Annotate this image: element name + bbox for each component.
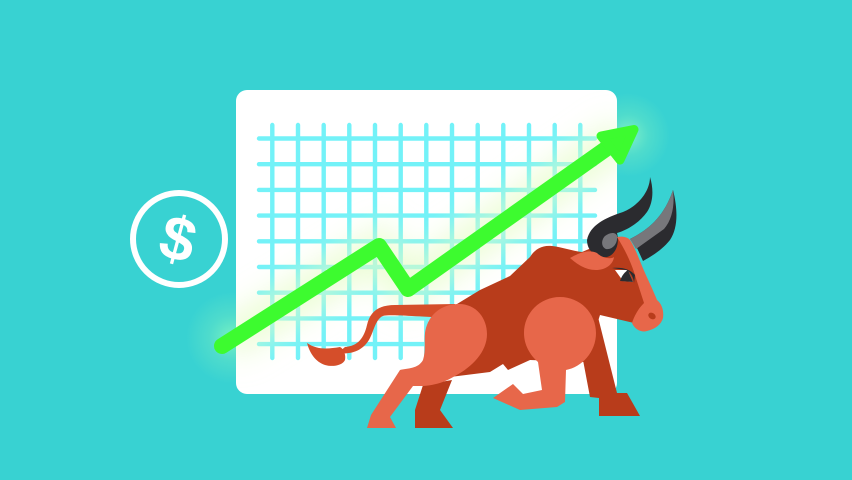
- arrow glow: bottom left: [186, 292, 278, 384]
- bull body and head: [450, 237, 648, 377]
- bull far horn: [630, 190, 676, 261]
- icon: dollar coin: $: [152, 202, 203, 277]
- bull: [307, 177, 676, 428]
- bull near horn: [587, 177, 652, 257]
- chart card: [236, 90, 617, 394]
- infographic: bull market illustration: [130, 90, 676, 428]
- bull nostril: [647, 311, 657, 321]
- bull ear: [570, 251, 614, 270]
- bull eye: [612, 268, 635, 283]
- arrow glow: top right: [586, 93, 670, 177]
- arrow glow on card: [226, 135, 625, 342]
- bull far hind leg: [415, 380, 453, 428]
- bull face stripe and muzzle: [617, 237, 663, 331]
- bull haunch and hind leg: [367, 304, 487, 428]
- icon: dollar coin: [133, 193, 225, 285]
- bull far fore leg: [570, 317, 640, 416]
- bull tail: [307, 304, 455, 366]
- bull shoulder and fore leg: [493, 297, 596, 410]
- chart grid: [259, 125, 595, 358]
- rising green arrow: [222, 130, 634, 346]
